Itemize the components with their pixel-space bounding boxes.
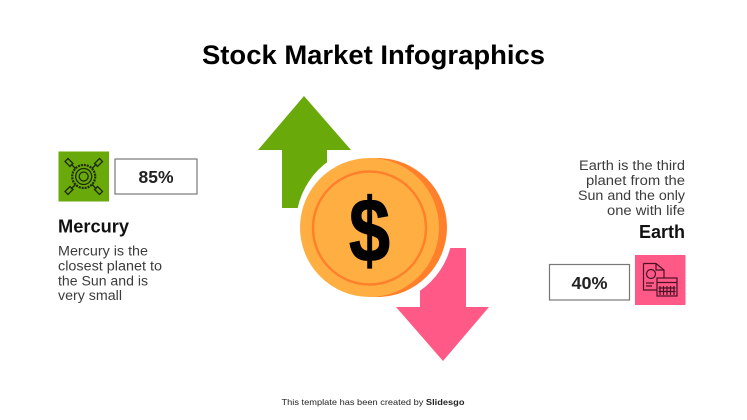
panel: Mercury bbox=[58, 152, 197, 303]
dollar sign: $ bbox=[349, 182, 390, 282]
heading: Mercury: Mercury bbox=[58, 216, 129, 236]
text block: Earth description: Earth is the third bbox=[579, 158, 685, 173]
footer credit: This template has been created by Slidesgo bbox=[282, 397, 464, 407]
central graphic: coin with arrows bbox=[258, 96, 489, 361]
icon: pink square with document and chart bbox=[635, 255, 686, 305]
text block: Mercury description: closest planet to bbox=[58, 258, 162, 274]
percentage box bbox=[550, 264, 630, 300]
title: Stock Market Infographics bbox=[202, 40, 545, 70]
percentage box bbox=[115, 159, 197, 194]
percentage box: 40% bbox=[572, 273, 608, 293]
percentage box: 85% bbox=[138, 167, 174, 187]
text block: Mercury description bbox=[58, 244, 162, 303]
text block: Earth description: one with life bbox=[607, 203, 685, 218]
text block: Earth description bbox=[578, 158, 685, 218]
text block: Earth description: planet from the bbox=[586, 173, 685, 188]
heading: Earth: Earth bbox=[639, 222, 685, 242]
text block: Earth description: Sun and the only bbox=[578, 188, 685, 203]
text block: Mercury description: very small bbox=[58, 288, 122, 303]
arrow: up bbox=[258, 96, 351, 208]
text block: Mercury description: the Sun and is bbox=[58, 274, 148, 288]
text block: Mercury description: Mercury is the bbox=[58, 244, 148, 258]
icon: coin bbox=[300, 158, 447, 297]
icon: green square with coin network bbox=[58, 152, 109, 202]
panel: Earth bbox=[550, 158, 686, 305]
arrow: down bbox=[396, 248, 489, 361]
